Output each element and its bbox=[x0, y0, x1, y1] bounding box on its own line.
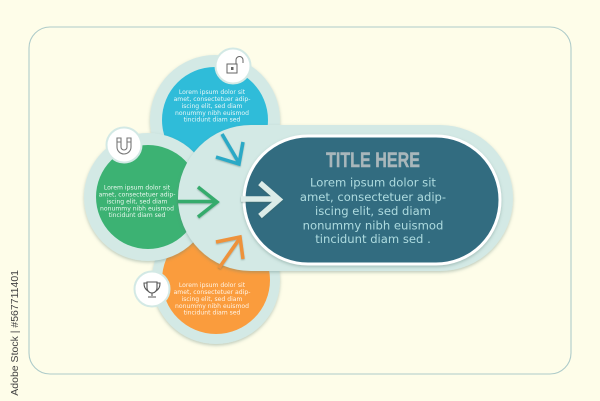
blue circle text: amet, consectetuer adip- bbox=[174, 96, 250, 103]
frame border bbox=[29, 27, 571, 374]
main text: iscing elit, sed diam bbox=[315, 204, 431, 218]
main title: TITLE HERE bbox=[326, 149, 420, 172]
main text: Lorem ipsum dolor sit bbox=[310, 176, 436, 190]
blue circle text: tincidunt diam sed bbox=[184, 116, 241, 124]
green circle text: amet, consectetuer adip- bbox=[99, 192, 175, 198]
panel: green circle bbox=[84, 133, 212, 261]
icon: open padlock bbox=[216, 48, 250, 84]
blue circle text: iscing elit, sed diam bbox=[182, 103, 243, 110]
main text: nonummy nibh euismod bbox=[303, 218, 443, 232]
orange circle text: Lorem ipsum dolor sit bbox=[179, 282, 246, 289]
green circle text: tincidunt diam sed bbox=[109, 212, 166, 219]
green circle text: nonummy nibh euismod bbox=[100, 206, 174, 212]
green circle text: Lorem ipsum dolor sit bbox=[104, 184, 171, 192]
panel: orange circle bbox=[152, 216, 280, 344]
main text: amet, consectetuer adip- bbox=[300, 190, 446, 204]
arrow: green bbox=[178, 187, 217, 217]
arrow: blue bbox=[216, 134, 243, 164]
green circle text: iscing elit, sed diam bbox=[107, 198, 168, 206]
stock id label: Adobe Stock | #567711401 bbox=[9, 270, 21, 396]
panel: pale pill bbox=[178, 125, 513, 271]
blue circle text: Lorem ipsum dolor sit bbox=[179, 89, 246, 96]
icon: magnet bbox=[106, 128, 142, 162]
orange circle text: nonummy nibh euismod bbox=[175, 303, 249, 310]
icon: trophy bbox=[134, 272, 170, 306]
arrow: white bbox=[241, 183, 279, 216]
orange circle text: tincidunt diam sed bbox=[184, 310, 241, 316]
orange circle text: amet, consectetuer adip- bbox=[174, 289, 250, 296]
blue circle text: nonummy nibh euismod bbox=[175, 110, 249, 117]
arrow: orange bbox=[216, 237, 243, 268]
main text: tincidunt diam sed . bbox=[315, 232, 431, 246]
panel: blue circle bbox=[150, 55, 280, 185]
panel: main dark pill bbox=[241, 136, 500, 264]
orange circle text: iscing elit, sed diam bbox=[182, 296, 243, 303]
